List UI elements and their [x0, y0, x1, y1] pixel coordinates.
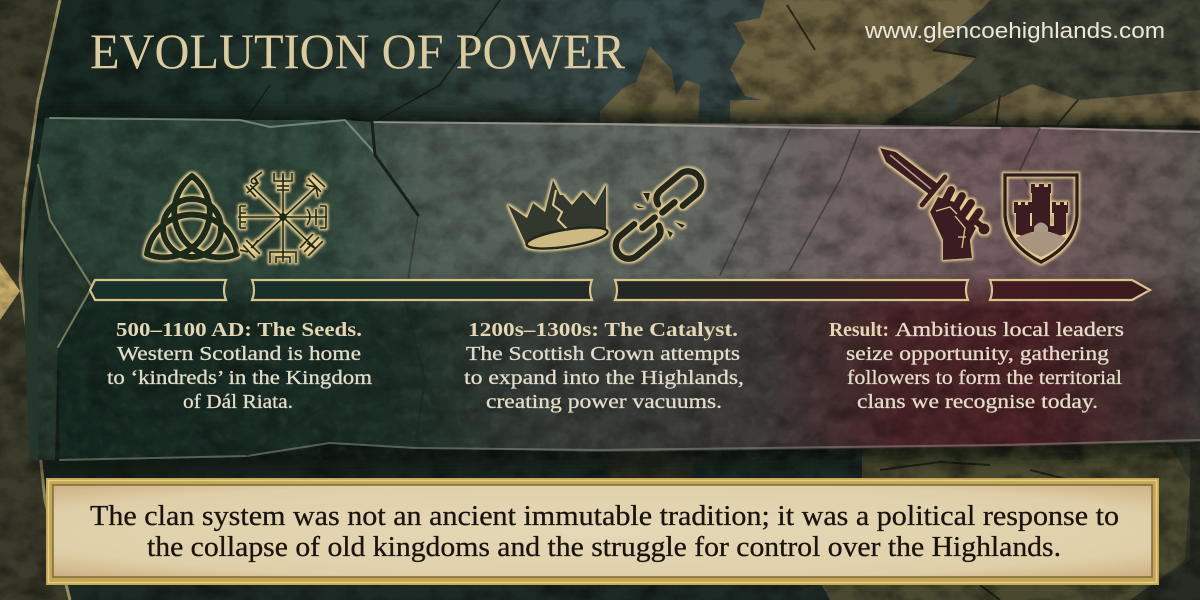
- icon: castle shield: [1005, 175, 1077, 262]
- text block: result: Result:: [829, 319, 889, 341]
- lower link: [610, 211, 666, 264]
- icon: triquetra: [147, 176, 237, 257]
- sparks: [635, 193, 685, 238]
- pommel: [975, 221, 984, 228]
- crossguard: [922, 177, 945, 205]
- upper link: [651, 166, 707, 219]
- background cracks: [235, 0, 500, 135]
- slab dark texture: [38, 118, 1200, 460]
- icon: vegvisir: [238, 172, 327, 263]
- callout: parchment conclusion: The clan system was not an ancient immutable tradition; it was a political response to: [90, 501, 1119, 532]
- icon: broken chain: [610, 166, 707, 264]
- slab lower dark section: [38, 118, 1200, 460]
- panel: stone slab timeline: [24, 118, 1200, 460]
- background: map landmass bottom: [600, 440, 1200, 600]
- fist and wrist: [930, 197, 976, 260]
- slab upper lit section: [38, 118, 1200, 306]
- text block: the seeds: of Dál Riata.: [183, 391, 293, 413]
- slab left hilt stone: [24, 165, 92, 460]
- text block: the seeds: to ‘kindreds’ in the Kingdom: [107, 367, 372, 389]
- text block: the catalyst: to expand into the Highlands,: [464, 367, 744, 389]
- slab light grain: [38, 118, 1200, 460]
- text block: the catalyst: creating power vacuums.: [486, 391, 722, 413]
- fingers: [946, 190, 979, 225]
- text block: the seeds: [107, 319, 372, 413]
- title: EVOLUTION OF POWER: [90, 23, 626, 79]
- text block: result: followers to form the territorial: [847, 367, 1122, 389]
- website url: www.glencoehighlands.com: [864, 18, 1165, 43]
- text block: the seeds: 500–1100 AD: The Seeds.: [116, 319, 362, 341]
- background: map landmass top right: [600, 0, 1200, 135]
- text block: the catalyst: 1200s–1300s: The Catalyst.: [468, 319, 738, 341]
- slab edge highlights: [38, 118, 1200, 460]
- callout: parchment conclusion: [46, 478, 1159, 585]
- callout: parchment conclusion: the collapse of old kingdoms and the struggle for control over the Highlands.: [147, 532, 1061, 563]
- text block: result: clans we recognise today.: [857, 391, 1098, 413]
- text block: the catalyst: [464, 319, 744, 413]
- background: left stone edge with gold line: [0, 0, 70, 600]
- icon: broken crown: [508, 180, 609, 253]
- text block: the seeds: Western Scotland is home: [117, 343, 361, 365]
- text block: result: seize opportunity, gathering: [846, 343, 1109, 365]
- text block: result: Ambitious local leaders: [895, 319, 1124, 341]
- text block: result: [829, 319, 1124, 413]
- background: shadow around slab: [50, 108, 1200, 478]
- blade: [880, 148, 938, 195]
- text block: the catalyst: The Scottish Crown attempts: [466, 343, 740, 365]
- background: dark floor below slab: [40, 440, 870, 600]
- timeline sword bar: [90, 280, 1150, 300]
- icon: sword and fist: [880, 148, 990, 260]
